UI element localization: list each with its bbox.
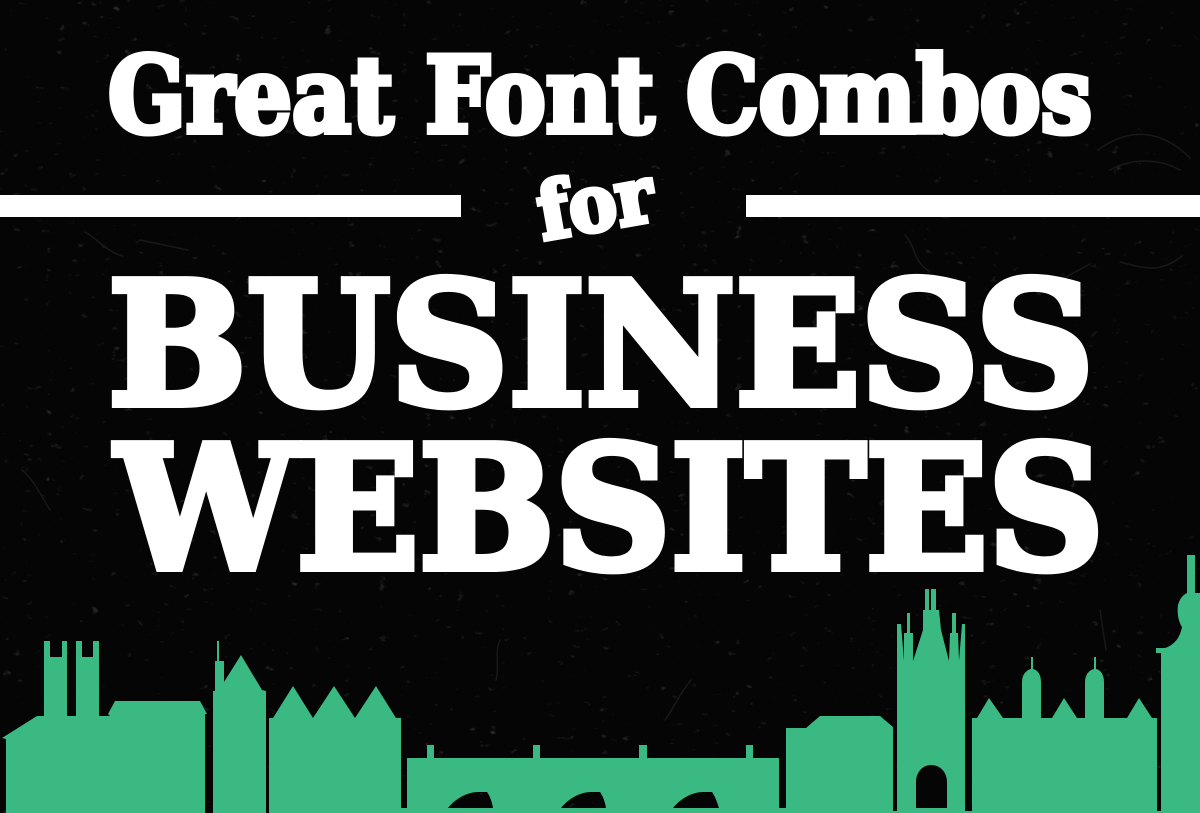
headline: WEBSITES: WEBSITES [114, 409, 1104, 609]
green city skyline [2, 555, 1200, 813]
building: domed palace [965, 657, 1161, 813]
word: for: for [530, 149, 661, 259]
building: spire tower [213, 641, 266, 813]
tower: domed right edge [1156, 555, 1200, 813]
headline: BUSINESS: BUSINESS [108, 245, 1094, 445]
gate tower [897, 589, 965, 813]
building: triple gable [269, 686, 401, 813]
building: twin towers hall [2, 641, 207, 813]
divider bar: left [0, 195, 461, 217]
divider bar: right [746, 195, 1200, 217]
bridge with arches [401, 716, 897, 813]
